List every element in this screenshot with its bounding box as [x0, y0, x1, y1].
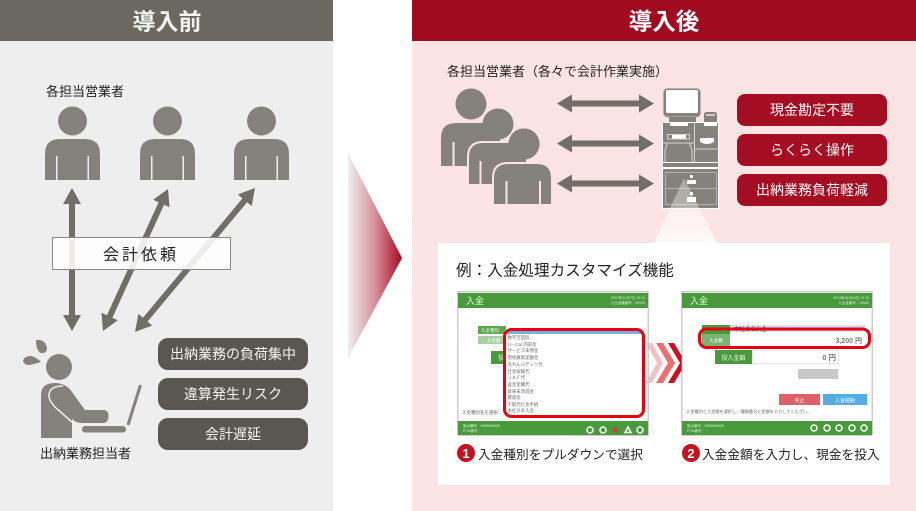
pill: no cash counting: 現金勘定不要 — [770, 102, 854, 118]
dropdown list: ＪＡＦ代 — [508, 374, 526, 381]
screen 2: amount entry: 0 円 — [822, 353, 836, 362]
screen 2: amount entry: 入出金番号：10842 — [838, 300, 869, 305]
screen 2: amount entry: 入金 — [690, 295, 708, 306]
screen 1: dropdown: 入出金種番号：99999 — [611, 300, 645, 305]
screen 2: amount entry: 入金開始 — [835, 397, 855, 404]
pill: workload concentration: 出納業務の負荷集中 — [170, 346, 296, 362]
card title: 例：入金処理カスタマイズ機能 — [456, 262, 674, 280]
screen 2: amount entry: 本社ＯＢ入金 — [734, 325, 768, 333]
dropdown list: 数学万回収 — [508, 334, 530, 341]
panel: before — [0, 0, 333, 511]
screen 1: dropdown: 入金種別名を選択 — [462, 409, 498, 416]
screen 2: amount entry: 中止 — [794, 397, 805, 404]
screen 1: dropdown: 2017年12月7日 10:14 — [611, 295, 645, 300]
screen 2: amount entry: 2014年06月20日 13:10 — [833, 295, 869, 300]
arrow: top two-way — [557, 94, 654, 112]
box: accounting request: 会計依頼 — [103, 246, 179, 264]
arrow: before to after — [348, 153, 402, 358]
pill: settlement risk: 違算発生リスク — [184, 386, 282, 402]
dropdown list: サービス未預金 — [508, 347, 539, 354]
label: cashier: 出納業務担当者 — [40, 446, 131, 461]
screen 1: dropdown: PCN番号： — [463, 428, 481, 433]
heading: before — [0, 0, 333, 41]
label: sales staff each: 各担当営業者（各々で会計作業実施） — [447, 64, 668, 79]
dropdown list: 雑収金 — [508, 394, 521, 401]
icon: sales person 3 — [234, 106, 289, 180]
icon: sales people group — [441, 88, 552, 205]
dropdown list: U－Car 内前金 — [508, 341, 537, 348]
pill: no cash counting — [737, 94, 887, 126]
pill: easy operation — [737, 134, 887, 166]
arrow: middle two-way — [557, 134, 654, 152]
heading: before: 導入前 — [132, 8, 202, 34]
screen 2: amount entry: 拠点番号：0999999999 — [687, 423, 724, 428]
pill: accounting delay — [158, 418, 308, 450]
icon: stressed cashier — [23, 340, 140, 438]
dropdown list: 現地買取差額金 — [508, 354, 539, 361]
icon: cash register kiosk — [662, 88, 718, 208]
screen 1: dropdown: 投 — [498, 354, 504, 362]
screen 2: amount entry: 投入金額 — [721, 354, 746, 362]
pill: accounting delay: 会計遅延 — [205, 426, 261, 442]
pill: workload concentration — [158, 338, 308, 370]
step 1 caption — [457, 444, 643, 462]
pill: reduced workload — [737, 174, 887, 206]
panel: after — [412, 0, 916, 511]
pill: settlement risk — [158, 378, 308, 410]
dropdown list: 返金定費代 — [508, 381, 530, 388]
heading: after — [412, 0, 916, 41]
step 2 caption — [682, 444, 880, 462]
screen 1: dropdown: 入金額 — [487, 337, 501, 344]
arrow: vertical — [63, 188, 81, 331]
label: sales staff: 各担当営業者 — [46, 84, 124, 99]
highlight: dropdown — [504, 330, 644, 416]
screen 2: amount entry: 入金額 — [709, 337, 723, 344]
pill: easy operation: らくらく操作 — [770, 142, 854, 158]
icon: sales person 1 — [45, 106, 100, 180]
step 2 caption: 2 — [687, 446, 695, 461]
step 1 caption: 入金種別をプルダウンで選択 — [478, 447, 643, 462]
chevrons: next step — [646, 343, 686, 383]
dropdown list: 売れんルデッツ代 — [508, 361, 543, 368]
pill: reduced workload: 出納業務負荷軽減 — [756, 182, 868, 198]
dropdown list: 本社ＯＢ入金 — [508, 407, 534, 414]
screen 1: dropdown — [458, 292, 648, 436]
arrow: middle diagonal — [95, 185, 176, 335]
arrow: bottom two-way — [557, 174, 654, 192]
card: example feature — [438, 243, 890, 485]
screen 2: amount entry: 3,200 円 — [836, 337, 862, 345]
screen 2: amount entry: 入金種別と入金額を選択し、種類番号と金額を入力してください。 — [686, 408, 811, 415]
arrow: right diagonal — [128, 182, 262, 338]
screen 2: amount entry: PCN番号： — [687, 428, 705, 433]
dropdown list: 下取代行金手続 — [508, 401, 539, 408]
screen 2: amount entry — [682, 292, 872, 436]
screen 1: dropdown: 入金 — [466, 295, 484, 306]
dropdown list: 新車未済前金 — [508, 388, 534, 395]
screen 1: dropdown: 拠点編号：9999999999 — [463, 423, 500, 428]
step 2 caption: 入金金額を入力し、現金を投入 — [702, 447, 880, 462]
screen 1: dropdown: 入金種別 — [481, 327, 499, 334]
highlight: amount — [700, 329, 870, 348]
heading: after: 導入後 — [629, 8, 700, 34]
spotlight beam — [654, 178, 717, 243]
dropdown list: 仕金保険代 — [508, 368, 530, 375]
icon: sales person 2 — [140, 106, 195, 180]
box: accounting request — [52, 238, 230, 270]
dropdown list — [505, 330, 643, 416]
step 1 caption: 1 — [462, 446, 470, 461]
